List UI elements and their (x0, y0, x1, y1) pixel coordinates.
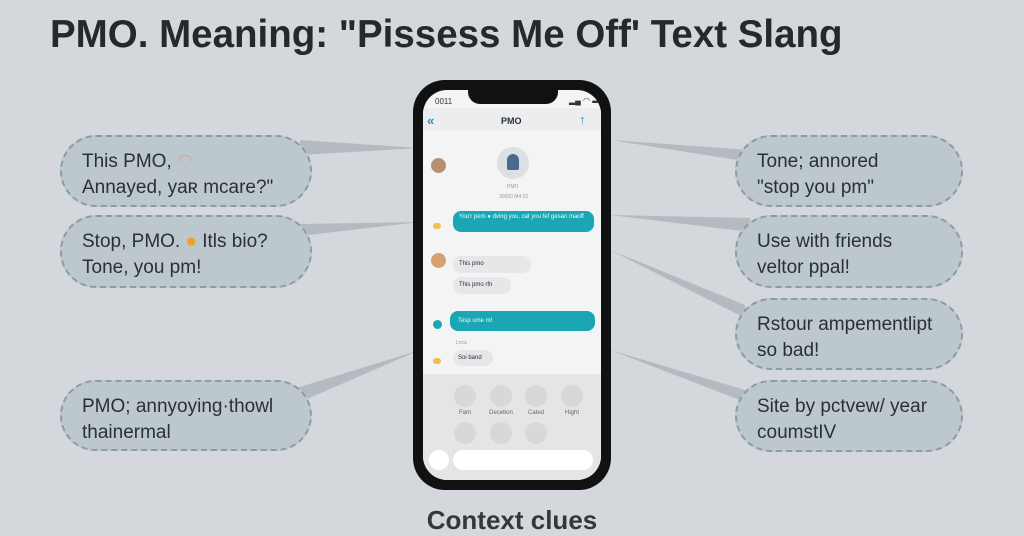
left bubble 1: Annayed, yaʀ mcare?" (82, 177, 273, 198)
screen (423, 90, 601, 480)
screen: « (427, 113, 434, 128)
avatar (497, 147, 529, 179)
teal message 1 (453, 211, 594, 232)
left bubble 3 (60, 380, 312, 451)
right bubble 1: Tone; annored (757, 151, 878, 172)
action panel: Decetion (489, 410, 513, 416)
notch (468, 90, 558, 104)
action panel: Fam (459, 410, 471, 416)
action panel: Cated (528, 410, 544, 416)
right bubble 4 (735, 380, 963, 452)
left bubble 3: PMO; annyoying·thowl (82, 396, 273, 417)
screen: PMO (507, 184, 518, 190)
right bubble 1: "stop you pm" (757, 177, 874, 198)
teal message 2 (450, 311, 595, 331)
right bubble 1 (735, 135, 963, 207)
phone (413, 80, 611, 490)
header (423, 108, 601, 130)
title: PMO. Meaning: "Pissess Me Off' Text Slang (50, 13, 843, 56)
input bar (453, 450, 593, 470)
left bubble 1: This PMO, ◠ (82, 151, 194, 172)
right bubble 3: so bad! (757, 340, 819, 361)
right bubble 4: Site by pctvew/ year (757, 396, 927, 417)
right bubble 3 (735, 298, 963, 370)
screen: This pmo rfn (459, 282, 492, 288)
left bubble 2: Tone, you pm! (82, 257, 201, 278)
grey messages (431, 253, 446, 268)
screen: 0011 (435, 97, 452, 106)
right bubble 4: coumstIV (757, 422, 836, 443)
screen: ↑ (579, 112, 586, 127)
action panel (423, 374, 601, 480)
left bubble 2 (60, 215, 312, 288)
right bubble 2 (735, 215, 963, 288)
right bubble 2: Use with friends (757, 231, 892, 252)
teal message 2: Tesp ume m! (458, 318, 492, 324)
screen: PMO (501, 116, 522, 126)
screen: Lnca (456, 340, 467, 346)
left bubble 3: thainermal (82, 422, 171, 443)
left bubble 2: Stop, PMO. ● Itls bio? (82, 231, 268, 252)
right bubble 3: Rstour ampementlipt (757, 314, 932, 335)
left bubble 1 (60, 135, 312, 207)
teal message 1: You'r pem ● dving you, cat you fef gesan maoff (459, 214, 584, 220)
screen: 30050 M4 22 (499, 194, 528, 200)
screen: Soi band (458, 355, 482, 361)
action panel: Hight (565, 410, 579, 416)
caption: Context clues (427, 505, 597, 535)
screen: This pmo (459, 261, 484, 267)
screen: ▂▄ ◠ ▬ (569, 96, 600, 105)
right bubble 2: veltor ppal! (757, 257, 850, 278)
